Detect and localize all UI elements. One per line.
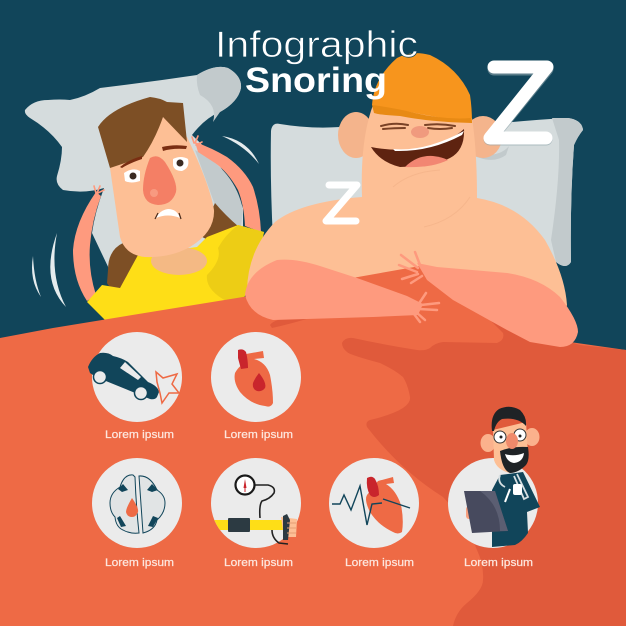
woman's fingers xyxy=(94,136,202,193)
label: Lorem ipsum xyxy=(105,429,174,441)
large Z xyxy=(490,67,547,139)
doctor glasses xyxy=(494,429,526,443)
woman's mouth xyxy=(155,209,181,219)
doctor stethoscope xyxy=(499,474,528,499)
blanket xyxy=(0,266,626,626)
doctor body xyxy=(492,472,540,547)
label: Lorem ipsum xyxy=(105,557,174,569)
woman's hair xyxy=(98,97,187,168)
blanket shadow small xyxy=(270,318,310,328)
woman's nose xyxy=(143,156,176,205)
icon: blood pressure cuff xyxy=(211,476,297,544)
woman's eyebrows xyxy=(120,145,187,168)
blanket shadow xyxy=(342,318,626,626)
woman's back hair xyxy=(107,203,239,288)
man's closed eyes xyxy=(381,124,455,129)
title: Snoring xyxy=(245,61,387,100)
title xyxy=(215,24,418,100)
item: heart with drop xyxy=(211,332,301,441)
man's left fingers xyxy=(414,293,439,322)
label: Lorem ipsum xyxy=(345,557,414,569)
label: Lorem ipsum xyxy=(464,557,533,569)
man's body and head xyxy=(247,105,567,330)
item: blood pressure xyxy=(211,458,301,569)
icon: impact star xyxy=(156,372,179,403)
doctor beard xyxy=(500,447,529,473)
item: doctor xyxy=(448,407,540,569)
doctor pen xyxy=(505,489,510,502)
doctor nose xyxy=(506,433,518,449)
item: brain xyxy=(92,458,182,569)
small Z xyxy=(326,185,357,221)
doctor pupils xyxy=(500,434,522,438)
icon: brain xyxy=(110,475,165,533)
woman's right arm xyxy=(195,142,261,232)
title: Infographic xyxy=(215,24,418,65)
woman's face xyxy=(110,117,214,257)
man's ears xyxy=(338,112,502,158)
woman's eyes xyxy=(124,157,188,182)
icon: car xyxy=(88,353,159,400)
item: heart rhythm xyxy=(329,458,419,569)
item: crash xyxy=(88,332,182,441)
doctor stethoscope chest piece xyxy=(513,484,522,495)
doctor tablet xyxy=(464,491,508,533)
chin crease xyxy=(393,170,470,227)
tablet highlight xyxy=(480,491,508,531)
icon: heart xyxy=(235,349,273,407)
doctor face xyxy=(493,422,528,473)
man's right arm xyxy=(417,263,578,347)
woman's left arm xyxy=(73,192,101,301)
motion lines xyxy=(32,136,259,307)
woman's shirt xyxy=(87,225,264,322)
doctor ears xyxy=(480,428,540,452)
man's hat xyxy=(372,53,472,123)
man's mouth xyxy=(371,129,464,167)
right pillow xyxy=(271,118,583,300)
doctor illustration xyxy=(464,407,540,547)
label: Lorem ipsum xyxy=(224,429,293,441)
woman's pillow xyxy=(25,67,243,275)
label: Lorem ipsum xyxy=(224,557,293,569)
icon: heart with ECG xyxy=(332,477,410,534)
man's left arm xyxy=(245,260,423,320)
doctor hair xyxy=(492,407,526,431)
doctor hand xyxy=(466,506,475,519)
man's right fingers xyxy=(399,252,422,283)
doctor smile xyxy=(505,453,524,463)
woman's neck xyxy=(151,247,207,275)
man's nose xyxy=(411,126,429,138)
